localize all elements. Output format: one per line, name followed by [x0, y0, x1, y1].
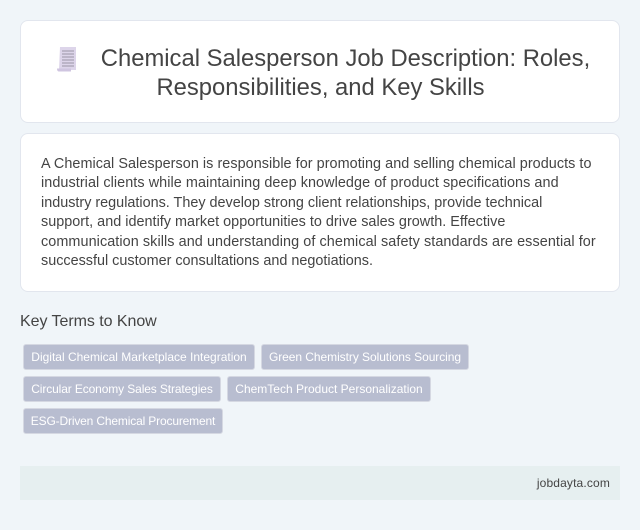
text block: job description: communication skills and understanding of chemical safety standards are essential for [41, 234, 596, 250]
tag: circular economy [23, 376, 221, 402]
tag: green chemistry [261, 344, 469, 370]
tag group: key terms [23, 344, 469, 434]
panel: title card [20, 20, 620, 123]
title: Chemical Salesperson Job Description: Roles, [101, 45, 590, 72]
title [101, 45, 590, 101]
tag: esg [23, 408, 223, 434]
text block: job description: successful customer consultations and negotiations. [41, 253, 373, 269]
panel: description card [20, 133, 620, 292]
text block: job description: industry regulations. They develop strong client relationships, provide technical [41, 194, 542, 210]
footer source: jobdayta.com [537, 476, 610, 490]
text block: job description: industrial clients while maintaining deep knowledge of product specifications and [41, 175, 559, 191]
title: Responsibilities, and Key Skills [156, 74, 485, 101]
heading: key terms: Key Terms to Know [20, 313, 157, 330]
tag: circular economy: Circular Economy Sales Strategies [31, 382, 213, 396]
tag: green chemistry: Green Chemistry Solutions Sourcing [269, 350, 461, 364]
tag: esg: ESG-Driven Chemical Procurement [31, 414, 215, 428]
text block: job description: support, and identify market opportunities to drive sales growth. Effective [41, 214, 505, 230]
tag: digital marketplace: Digital Chemical Marketplace Integration [31, 350, 247, 364]
tag: digital marketplace [23, 344, 255, 370]
text block: job description [41, 156, 596, 269]
text block: job description: A Chemical Salesperson is responsible for promoting and selling chemical products to [41, 156, 592, 172]
icon: document scroll [57, 47, 76, 72]
tag: chemtech [227, 376, 431, 402]
footer bar [20, 466, 620, 500]
tag: chemtech: ChemTech Product Personalization [235, 382, 423, 396]
